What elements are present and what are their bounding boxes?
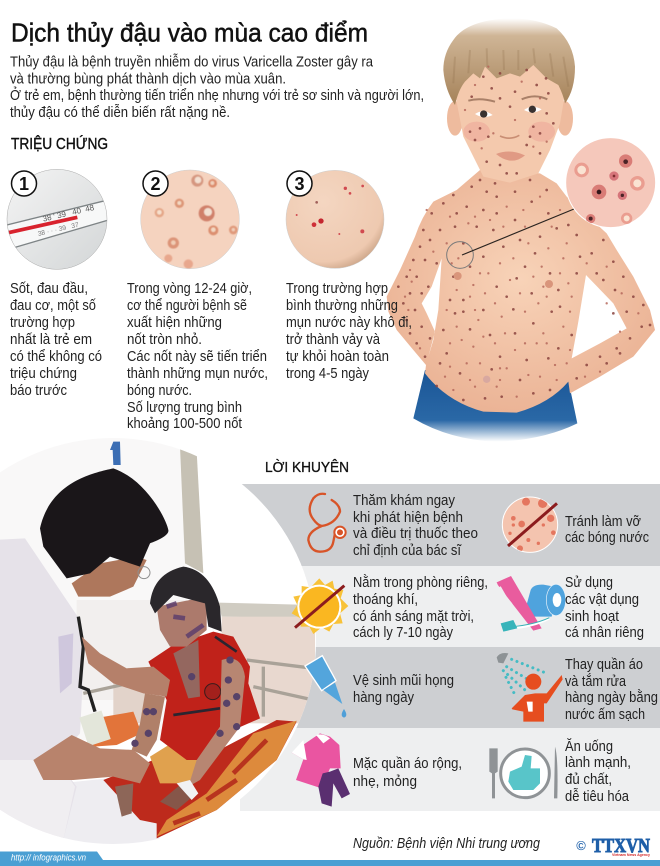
- text: symptom 2: Số lượng trung bình: [127, 399, 242, 416]
- boy head: [443, 18, 575, 183]
- text: symptom 2: Trong vòng 12-24 giờ,: [127, 280, 252, 297]
- text: symptom 1: [10, 280, 102, 399]
- patient blanket: [103, 720, 297, 838]
- text: symptom 2: [127, 280, 268, 432]
- advice text: row 4 right: [565, 738, 631, 805]
- footer bar: http:// infographics.vn: [11, 852, 86, 864]
- bed sheet: [64, 778, 160, 844]
- symptom 1 photo: thermometer: 38 · · · 39 37: [37, 222, 80, 238]
- advice text: row 4 left: [353, 755, 462, 790]
- text: symptom 2: bóng nước.: [127, 382, 192, 399]
- advice text: row 4 right: lành mạnh,: [565, 754, 631, 771]
- intro text: Ở trẻ em, bệnh thường tiến triển nhẹ nhưng với trẻ sơ sinh và người lớn,: [10, 86, 424, 104]
- badge: number 1: 1: [19, 174, 29, 194]
- advice text: row 2 right: [565, 574, 644, 641]
- footer bar: [0, 852, 660, 866]
- text: symptom 1: có thể không có: [10, 348, 102, 365]
- icon: clothes: [292, 733, 350, 807]
- advice text: row 3 right: Thay quần áo: [565, 656, 643, 673]
- badge: number 2: [143, 171, 168, 196]
- text: symptom 3: bình thường những: [286, 297, 398, 314]
- text: symptom 2: cơ thể người bệnh sẽ: [127, 297, 247, 314]
- advice text: row 2 left: [353, 574, 488, 641]
- advice text: row 1 right: [565, 513, 649, 546]
- advice text: row 1 left: và điều trị thuốc theo: [353, 525, 478, 542]
- advice text: row 4 right: dễ tiêu hóa: [565, 788, 630, 805]
- advice text: row 3 left: hàng ngày: [353, 689, 414, 706]
- advice text: row 4 left: Mặc quần áo rộng,: [353, 755, 462, 772]
- logo: TTXVN: Vietnam News Agency: [612, 852, 651, 857]
- advice text: row 4 right: đủ chất,: [565, 771, 612, 788]
- pillow: [92, 712, 139, 746]
- advice text: row 1 left: khi phát hiện bệnh: [353, 509, 463, 526]
- doctor hair: [40, 468, 168, 578]
- icon: plate with thumbs up: [489, 747, 558, 798]
- badge: number 3: 3: [294, 174, 305, 194]
- patient dress: [148, 632, 260, 760]
- text: symptom 3: [286, 280, 412, 382]
- advice text: row 3 left: [353, 672, 454, 706]
- badge: number 2: 2: [150, 174, 161, 194]
- text: symptom 3: trong 4-5 ngày: [286, 365, 369, 382]
- icon: personal items: [496, 576, 566, 632]
- heading: symptoms: TRIỆU CHỨNG: [11, 134, 108, 153]
- advice text: row 2 right: sinh hoạt: [565, 608, 620, 625]
- illustration: boy with chickenpox: [387, 18, 656, 442]
- heading: advice: LỜI KHUYÊN: [265, 459, 349, 476]
- advice text: row 2 right: cá nhân riêng: [565, 624, 644, 641]
- intro text: và thường bùng phát thành dịch vào mùa xuân.: [10, 70, 286, 88]
- advice text: row 1 right: Tránh làm vỡ: [565, 513, 641, 530]
- logo: TTXVN: ©: [576, 838, 586, 853]
- advice text: row 2 left: Nằm trong phòng riêng,: [353, 574, 488, 591]
- advice text: row 2 right: các vật dụng: [565, 591, 639, 608]
- text: symptom 1: báo trước: [10, 382, 67, 399]
- icon: do not break blisters: [502, 497, 558, 552]
- advice text: row 3 right: và tắm rửa: [565, 673, 627, 690]
- advice icons row 3 and 4: [292, 653, 563, 807]
- text: symptom 2: Các nốt này sẽ tiến triển: [127, 348, 267, 365]
- text: symptom 2: xuất hiện những: [127, 314, 222, 331]
- text: symptom 1: nhất là trẻ em: [10, 331, 92, 348]
- doctor shirt: [0, 538, 83, 840]
- chickenpox spots: [398, 67, 650, 400]
- skin detail inset: [566, 138, 656, 228]
- text: symptom 1: Sốt, đau đầu,: [10, 280, 88, 297]
- doctor face: [72, 557, 147, 597]
- logo: TTXVN: TTXVN: [592, 835, 650, 857]
- advice text: row 2 left: cách ly 7-10 ngày: [353, 624, 453, 641]
- text: symptom 2: nốt tròn nhỏ.: [127, 331, 202, 348]
- badge: number 1: [12, 171, 36, 196]
- intro text: [10, 54, 424, 121]
- icon: sun crossed out: [292, 578, 348, 634]
- patient face and hair: [157, 597, 207, 647]
- text: symptom 3: mụn nước này khô đi,: [286, 314, 412, 331]
- text: symptom 2: khoảng 100-500 nốt: [127, 415, 243, 432]
- advice text: row 1 left: [353, 492, 478, 559]
- magnifier ring and leader line: [447, 209, 574, 268]
- advice icons row 1 and 2: [292, 494, 566, 634]
- advice text: row 4 right: Ăn uống: [565, 738, 613, 755]
- advice text: row 4 left: nhẹ, mỏng: [353, 773, 417, 790]
- text: symptom 2: thành những mụn nước,: [127, 365, 268, 382]
- advice text: row 2 right: Sử dụng: [565, 574, 613, 591]
- advice text: row 3 right: nước ấm sạch: [565, 706, 645, 723]
- source note: Nguồn: Bệnh viện Nhi trung ương: [353, 835, 541, 852]
- text: symptom 3: tự khỏi hoàn toàn: [286, 348, 389, 365]
- icon: shower and person: [497, 653, 563, 722]
- advice text: row 1 left: Thăm khám ngay: [353, 492, 455, 509]
- text: symptom 1: triệu chứng: [10, 365, 77, 382]
- text: symptom 3: trở thành vảy và: [286, 331, 381, 348]
- text: symptom 3: Trong trường hợp: [286, 280, 388, 297]
- advice text: row 2 left: có ánh sáng mặt trời,: [353, 608, 474, 625]
- patient chest and arms: [173, 640, 200, 698]
- intro text: thủy đậu có thể diễn biến rất nặng nề.: [10, 104, 230, 121]
- symptom 1 photo: thermometer: 38 ' 39 40 48: [42, 203, 96, 224]
- symptom 3 photo: red spots: [286, 170, 384, 268]
- text: symptom 1: đau cơ, một số: [10, 297, 97, 314]
- icon: stethoscope: [308, 494, 346, 552]
- text: symptom 1: trường hợp: [10, 314, 75, 331]
- icon: nasal spray bottle: [305, 656, 346, 718]
- advice text: row 3 right: [565, 656, 658, 723]
- intro text: Thủy đậu là bệnh truyền nhiễm do virus Varicella Zoster gây ra: [10, 54, 374, 71]
- doctor arms: [82, 637, 170, 697]
- symptom 2 photo: blisters: [141, 170, 239, 269]
- advice text: row 2 left: thoáng khí,: [353, 591, 418, 608]
- photo: doctor examining patient: [0, 433, 316, 845]
- panel: symptoms images: [7, 169, 384, 269]
- boy body: [387, 170, 655, 442]
- advice text: row 3 left: Vệ sinh mũi họng: [353, 672, 454, 689]
- badge: number 3: [287, 171, 312, 196]
- title: Dịch thủy đậu vào mùa cao điểm: [11, 18, 368, 48]
- advice background bands: [240, 484, 660, 811]
- symptom 1 photo: thermometer: [7, 169, 108, 269]
- advice text: row 1 left: chỉ định của bác sĩ: [353, 542, 462, 559]
